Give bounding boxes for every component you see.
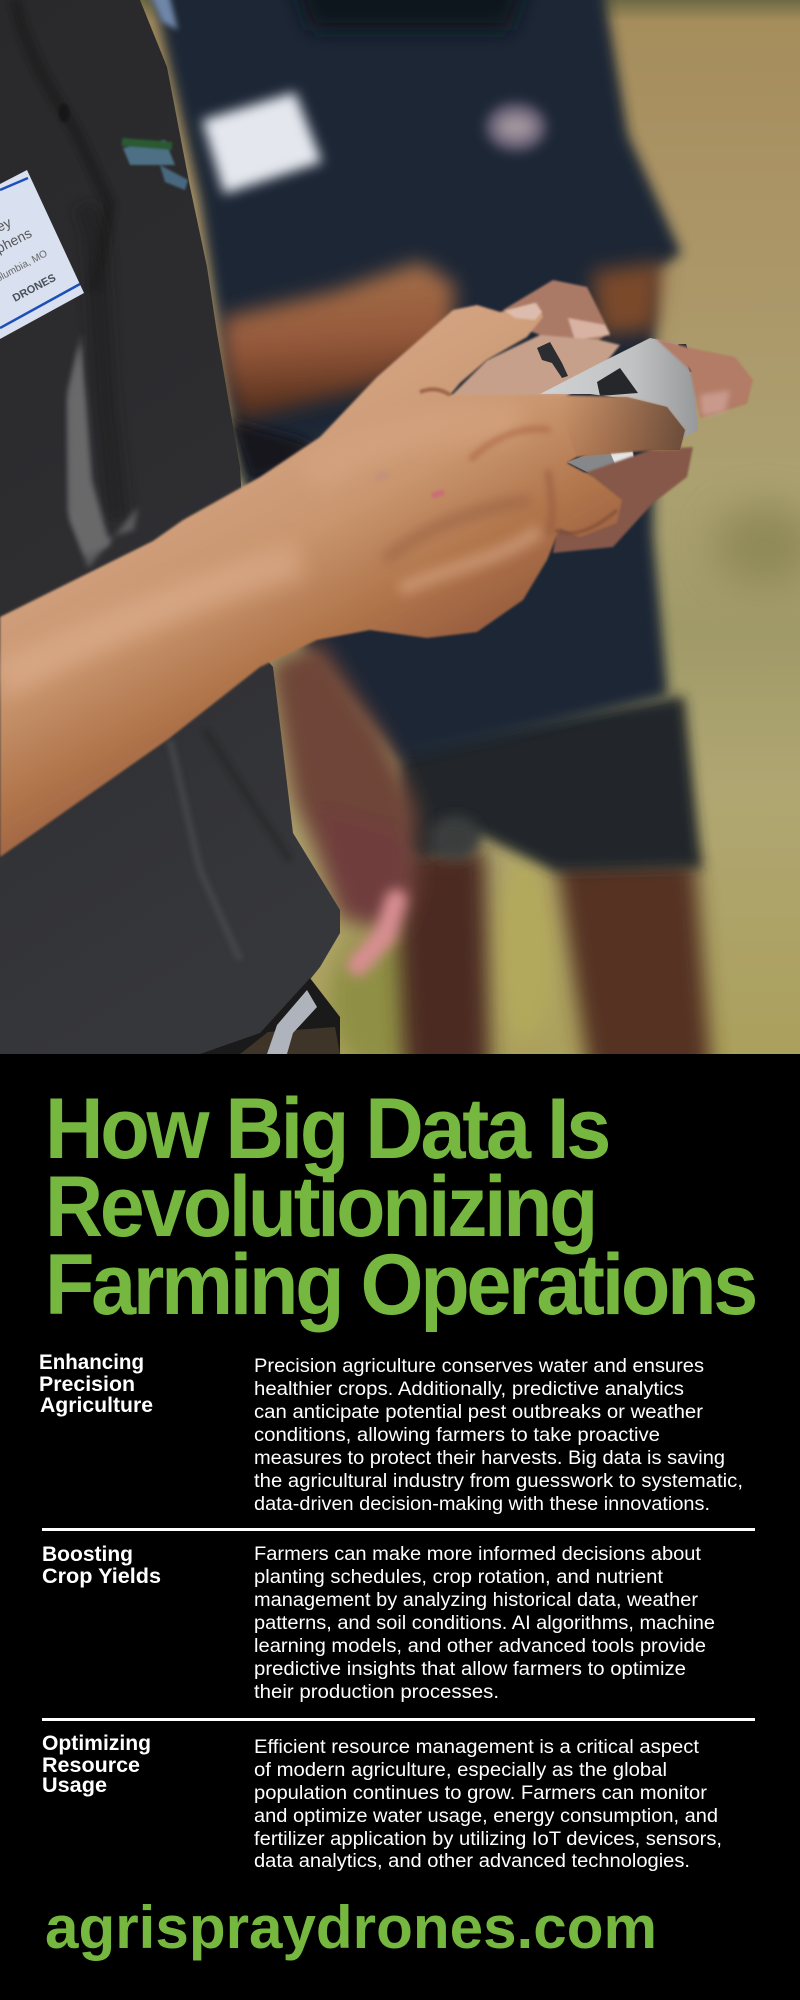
fingertip shade xyxy=(553,397,685,457)
heading: Optimizing xyxy=(42,1732,151,1755)
heading: Crop Yields xyxy=(42,1565,161,1588)
heading: Usage xyxy=(42,1774,107,1797)
section: Boosting Crop Yields xyxy=(42,1543,715,1703)
background person shirt xyxy=(150,0,681,760)
body text: healthier crops. Additionally, predictive analytics xyxy=(254,1379,684,1400)
body text: population continues to grow. Farmers can monitor xyxy=(254,1783,708,1804)
body text: and optimize water usage, energy consumption, and xyxy=(254,1806,718,1827)
right fingertips beyond the remote xyxy=(655,338,753,418)
shirt sheen xyxy=(68,333,138,568)
body text: data analytics, and other advanced technologies. xyxy=(254,1851,690,1872)
body text: patterns, and soil conditions. AI algorithms, machine xyxy=(254,1613,715,1634)
body text: learning models, and other advanced tools provide xyxy=(254,1636,706,1657)
body text: data-driven decision-making with these innovations. xyxy=(254,1494,710,1515)
background person forearm xyxy=(222,262,455,420)
heading: Boosting xyxy=(42,1543,133,1566)
thumbnail xyxy=(505,303,542,320)
shirt collar folds xyxy=(15,0,290,960)
background person shorts xyxy=(398,696,702,872)
foreground person second arm and blurred hand xyxy=(270,640,417,933)
body text xyxy=(254,1737,722,1872)
body text xyxy=(254,1544,715,1703)
heading xyxy=(42,1732,151,1797)
heading: Agriculture xyxy=(40,1394,153,1417)
body text: Precision agriculture conserves water and ensures xyxy=(254,1356,704,1377)
body text: Efficient resource management is a critical aspect xyxy=(254,1737,700,1758)
body text: management by analyzing historical data, weather xyxy=(254,1590,699,1611)
name tag xyxy=(0,170,84,339)
body text xyxy=(254,1356,743,1515)
blurred finger xyxy=(358,900,396,965)
background person legs xyxy=(395,850,712,1080)
foreground forearm and hand xyxy=(0,303,685,857)
title: Revolutionizing xyxy=(45,1159,595,1255)
section: Enhancing Precision Agriculture xyxy=(39,1351,743,1515)
body text: fertilizer application by utilizing IoT devices, sensors, xyxy=(254,1829,722,1850)
heading xyxy=(42,1543,161,1588)
body text: Farmers can make more informed decisions about xyxy=(254,1544,702,1565)
photo: hand holding a drone remote controller xyxy=(0,0,800,1054)
blurred name tag xyxy=(202,92,322,194)
title xyxy=(45,1081,756,1333)
skin shading and veins xyxy=(0,389,617,680)
remote controller xyxy=(537,338,698,478)
heading xyxy=(39,1351,153,1417)
name tag: DRONES xyxy=(11,272,58,305)
back fingers of foreground hand xyxy=(553,447,693,553)
body text: conditions, allowing farmers to take proactive xyxy=(254,1425,660,1446)
body text: planting schedules, crop rotation, and nutrient xyxy=(254,1567,664,1588)
heading: Precision xyxy=(39,1373,135,1396)
body text: predictive insights that allow farmers to optimize xyxy=(254,1659,686,1680)
footer website: agrispraydrones.com xyxy=(45,1894,657,1961)
heading: Enhancing xyxy=(39,1351,144,1374)
field background xyxy=(0,0,800,1054)
shirt logo xyxy=(122,140,188,190)
title: Farming Operations xyxy=(45,1237,756,1333)
body text: their production processes. xyxy=(254,1682,499,1703)
foreground shirt xyxy=(0,0,340,1054)
heading: Resource xyxy=(42,1754,140,1777)
body text: the agricultural industry from guesswork to systematic, xyxy=(254,1471,743,1492)
body text: can anticipate potential pest outbreaks or weather xyxy=(254,1402,704,1423)
section: Optimizing Resource Usage xyxy=(42,1732,722,1872)
body text: measures to protect their harvests. Big data is saving xyxy=(254,1448,725,1469)
background person hand on the remote xyxy=(445,280,620,402)
blurred shirt logo xyxy=(486,103,546,151)
title: How Big Data Is xyxy=(45,1081,609,1177)
body text: of modern agriculture, especially as the global xyxy=(254,1760,667,1781)
belt and waist xyxy=(200,978,340,1054)
